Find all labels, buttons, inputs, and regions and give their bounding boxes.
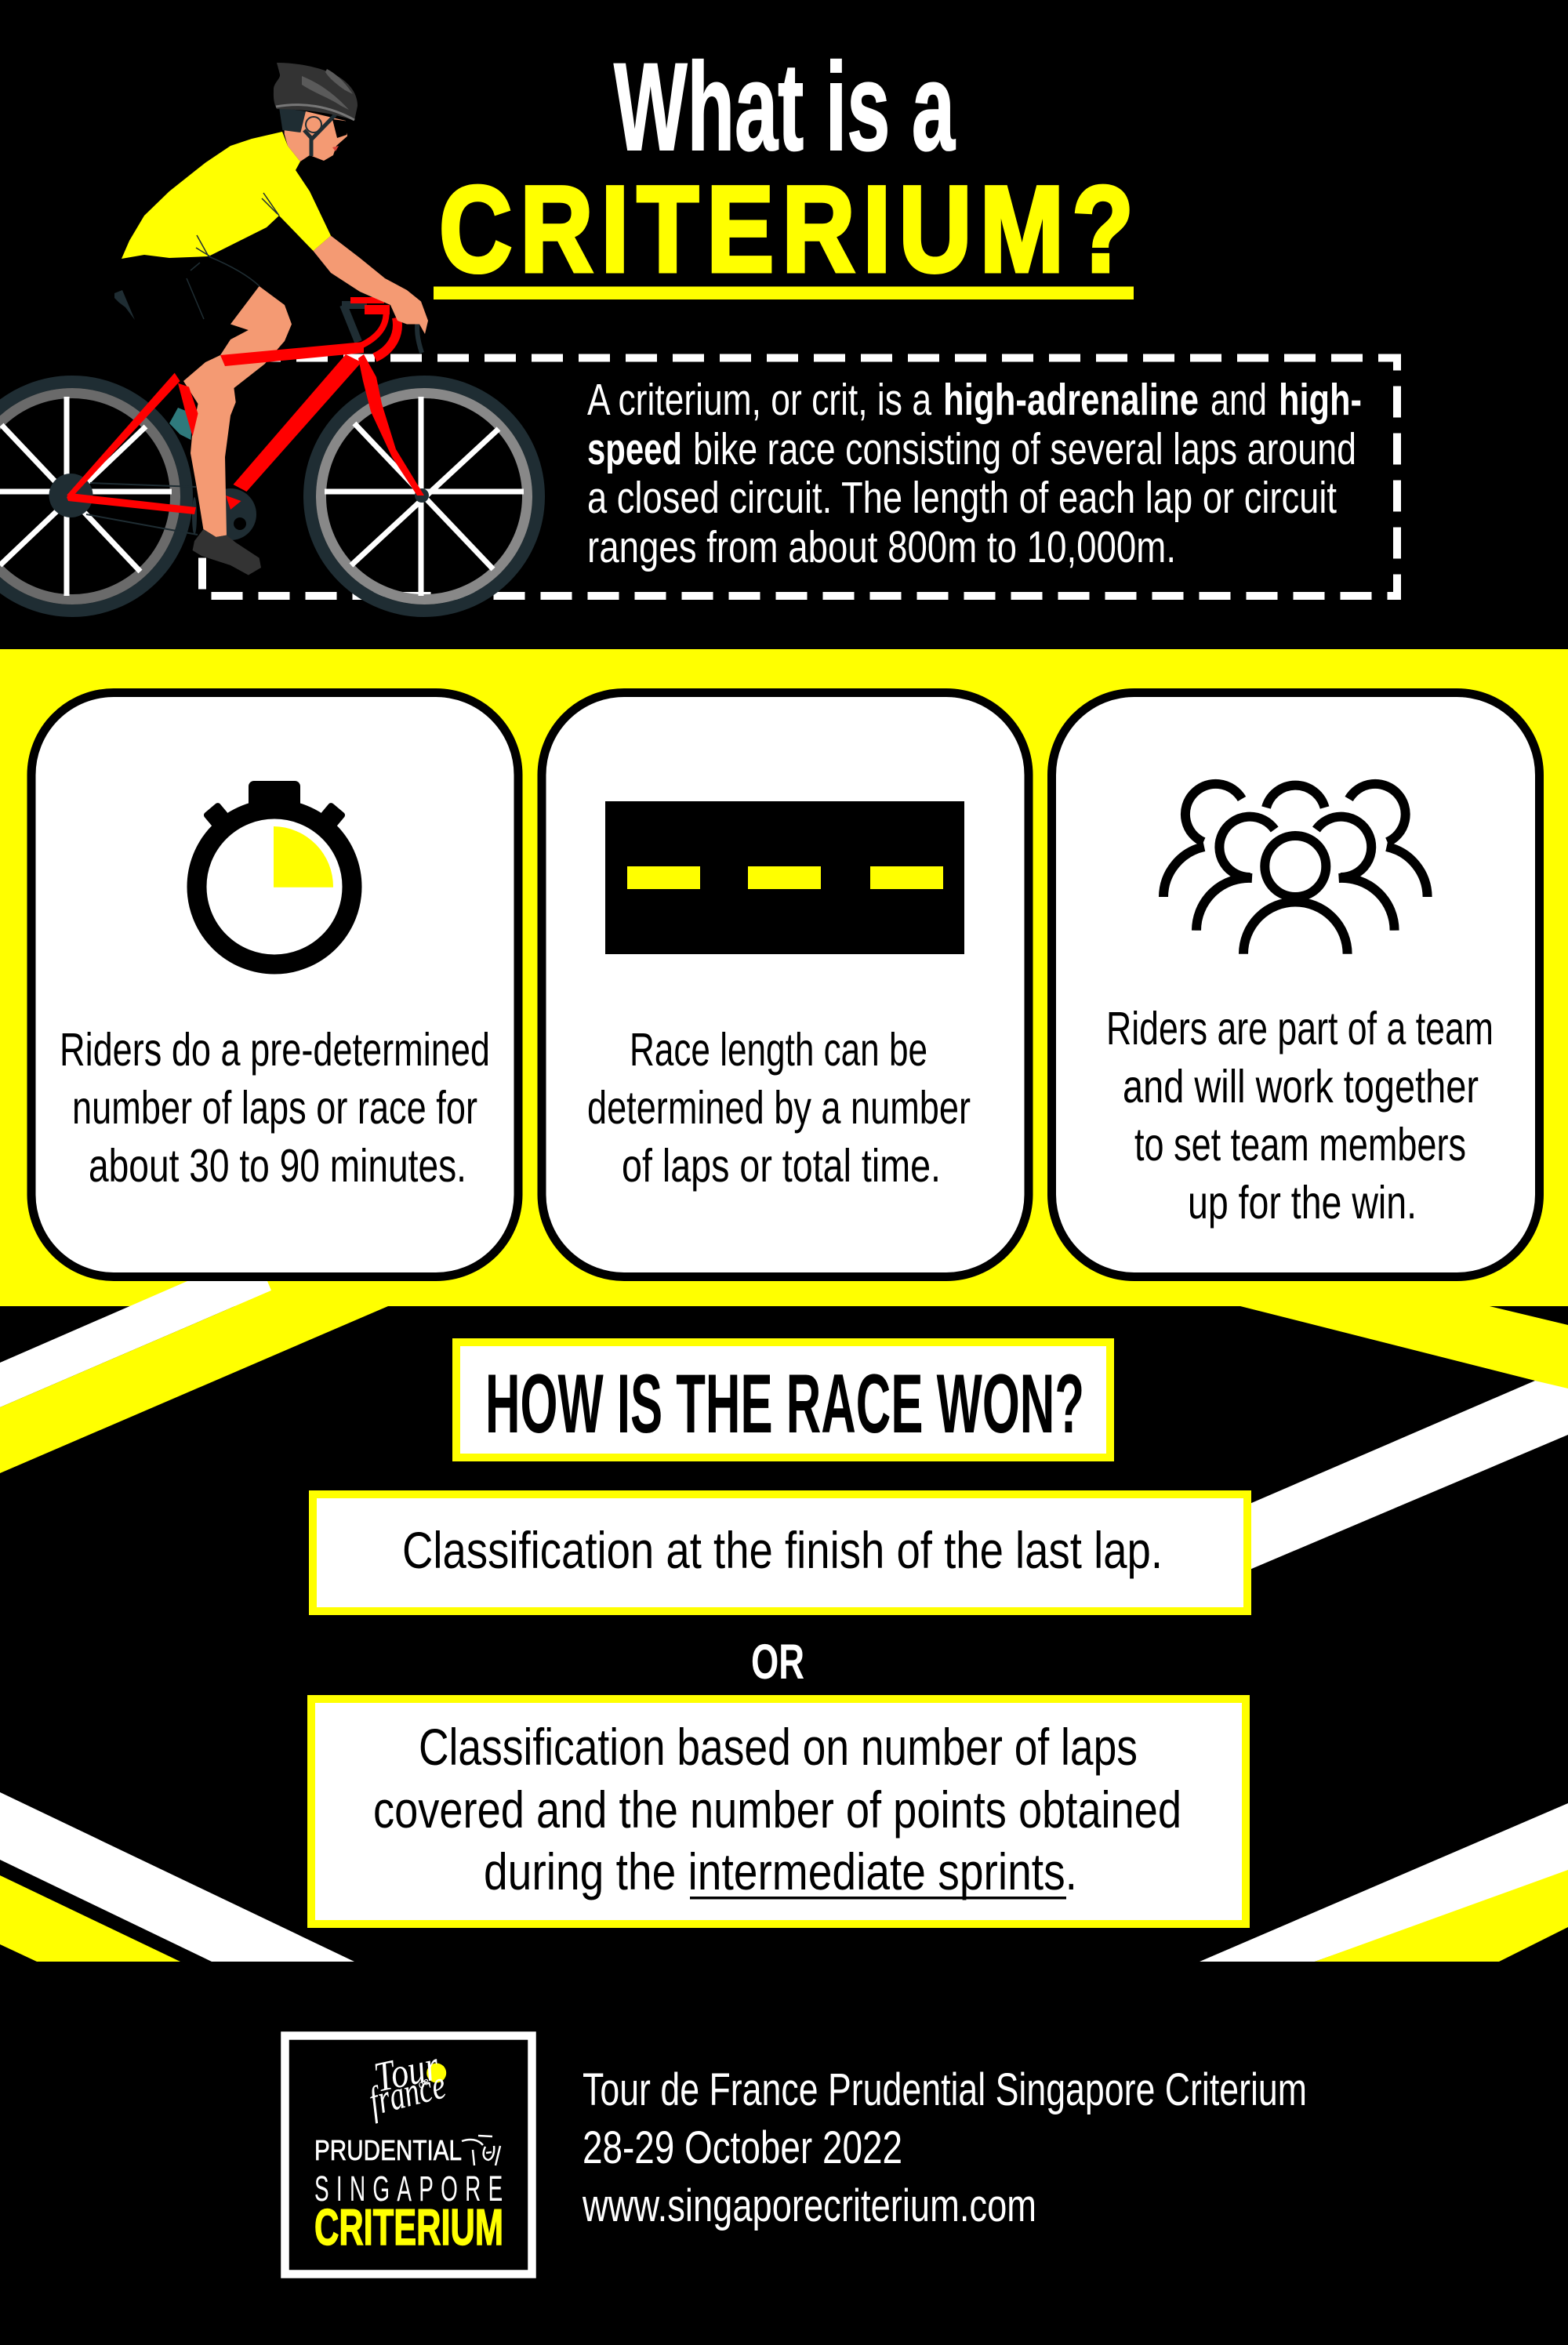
card text	[60, 1024, 490, 1192]
brake lever	[417, 318, 422, 353]
panel: laps card	[31, 693, 518, 1276]
card text: and will work together	[1123, 1061, 1479, 1113]
red bicycle frame	[67, 342, 424, 514]
panel: team card	[1052, 693, 1540, 1276]
panel: classification at finish	[313, 1494, 1247, 1611]
logo: tour de france	[365, 2042, 450, 2125]
heading box: how is the race won: HOW IS THE RACE WON?	[485, 1356, 1084, 1450]
description text: ranges from about 800m to 10,000m.	[587, 522, 1176, 572]
card text: number of laps or race for	[72, 1082, 477, 1134]
heading box: how is the race won	[456, 1342, 1110, 1457]
panel: classification by points: Classification based on number of laps	[419, 1718, 1138, 1776]
card text	[587, 1024, 971, 1192]
logo: prudence head	[462, 2136, 500, 2165]
shoe	[193, 529, 261, 575]
description text: a closed circuit. The length of each lap or circuit	[587, 473, 1337, 523]
yellow jersey	[122, 132, 331, 259]
rider arm	[314, 236, 428, 334]
description text	[587, 375, 1362, 572]
icon: front wheel	[310, 382, 539, 611]
card text: Riders do a pre-determined	[60, 1024, 490, 1076]
panel: classification at finish: Classification at the finish of the last lap.	[402, 1521, 1163, 1579]
logo: singapore: SINGAPORE	[314, 2169, 510, 2209]
card text: to set team members	[1134, 1119, 1466, 1171]
chain and chainring	[86, 483, 256, 540]
logo: tour de france: Tour	[370, 2042, 443, 2101]
card text: up for the win.	[1188, 1177, 1417, 1229]
logo: event lockup	[285, 2035, 532, 2274]
decorative stripes and yellow band	[0, 649, 1568, 1962]
icon: team of riders	[1163, 784, 1428, 954]
event details: www.singaporecriterium.com	[582, 2180, 1036, 2231]
title underline	[434, 287, 1134, 299]
dashed description box	[202, 358, 1397, 596]
stem	[342, 305, 367, 342]
far leg sock and saddle	[114, 290, 193, 440]
icon: stopwatch	[197, 781, 352, 964]
shorts detail lines	[187, 256, 260, 319]
description text: A criterium, or crit, is a	[587, 375, 931, 425]
icon: rear wheel	[0, 382, 187, 611]
panel: classification by points	[311, 1699, 1246, 1924]
event details: 28-29 October 2022	[583, 2122, 902, 2173]
logo: criterium: CRITERIUM	[314, 2198, 503, 2256]
title	[434, 37, 1142, 299]
card text: determined by a number	[587, 1082, 971, 1134]
rider leg and knee	[183, 286, 292, 537]
title line: CRITERIUM?: CRITERIUM?	[439, 162, 1142, 298]
title line: What is a: What is a	[614, 37, 956, 176]
card text: Race length can be	[630, 1024, 927, 1076]
logo: prudential wordmark: PRUDENTIAL	[314, 2134, 462, 2166]
panel: classification by points: covered and the number of points obtained	[373, 1781, 1181, 1839]
description text: high-adrenaline	[943, 375, 1199, 425]
rider head	[279, 107, 350, 162]
logo: tour de france: de	[416, 2075, 431, 2091]
panel: classification by points: during the intermediate sprints.	[484, 1842, 1077, 1900]
panel: race length card	[542, 693, 1029, 1276]
event details	[582, 2064, 1307, 2231]
description text: speed	[587, 424, 682, 474]
logo: tour de france: france	[365, 2063, 450, 2125]
description text: high-	[1279, 375, 1362, 425]
cyclist illustration	[0, 63, 539, 611]
helmet	[274, 63, 358, 121]
or label: OR	[751, 1635, 804, 1690]
card text: about 30 to 90 minutes.	[89, 1140, 466, 1192]
card text: of laps or total time.	[622, 1140, 941, 1192]
card text	[1106, 1003, 1494, 1229]
icon: road	[605, 801, 964, 954]
description text: and	[1210, 375, 1267, 425]
red handlebar	[350, 300, 397, 358]
event details: Tour de France Prudential Singapore Criterium	[583, 2064, 1307, 2115]
description text: bike race consisting of several laps around	[693, 424, 1356, 474]
black shorts	[122, 259, 268, 552]
